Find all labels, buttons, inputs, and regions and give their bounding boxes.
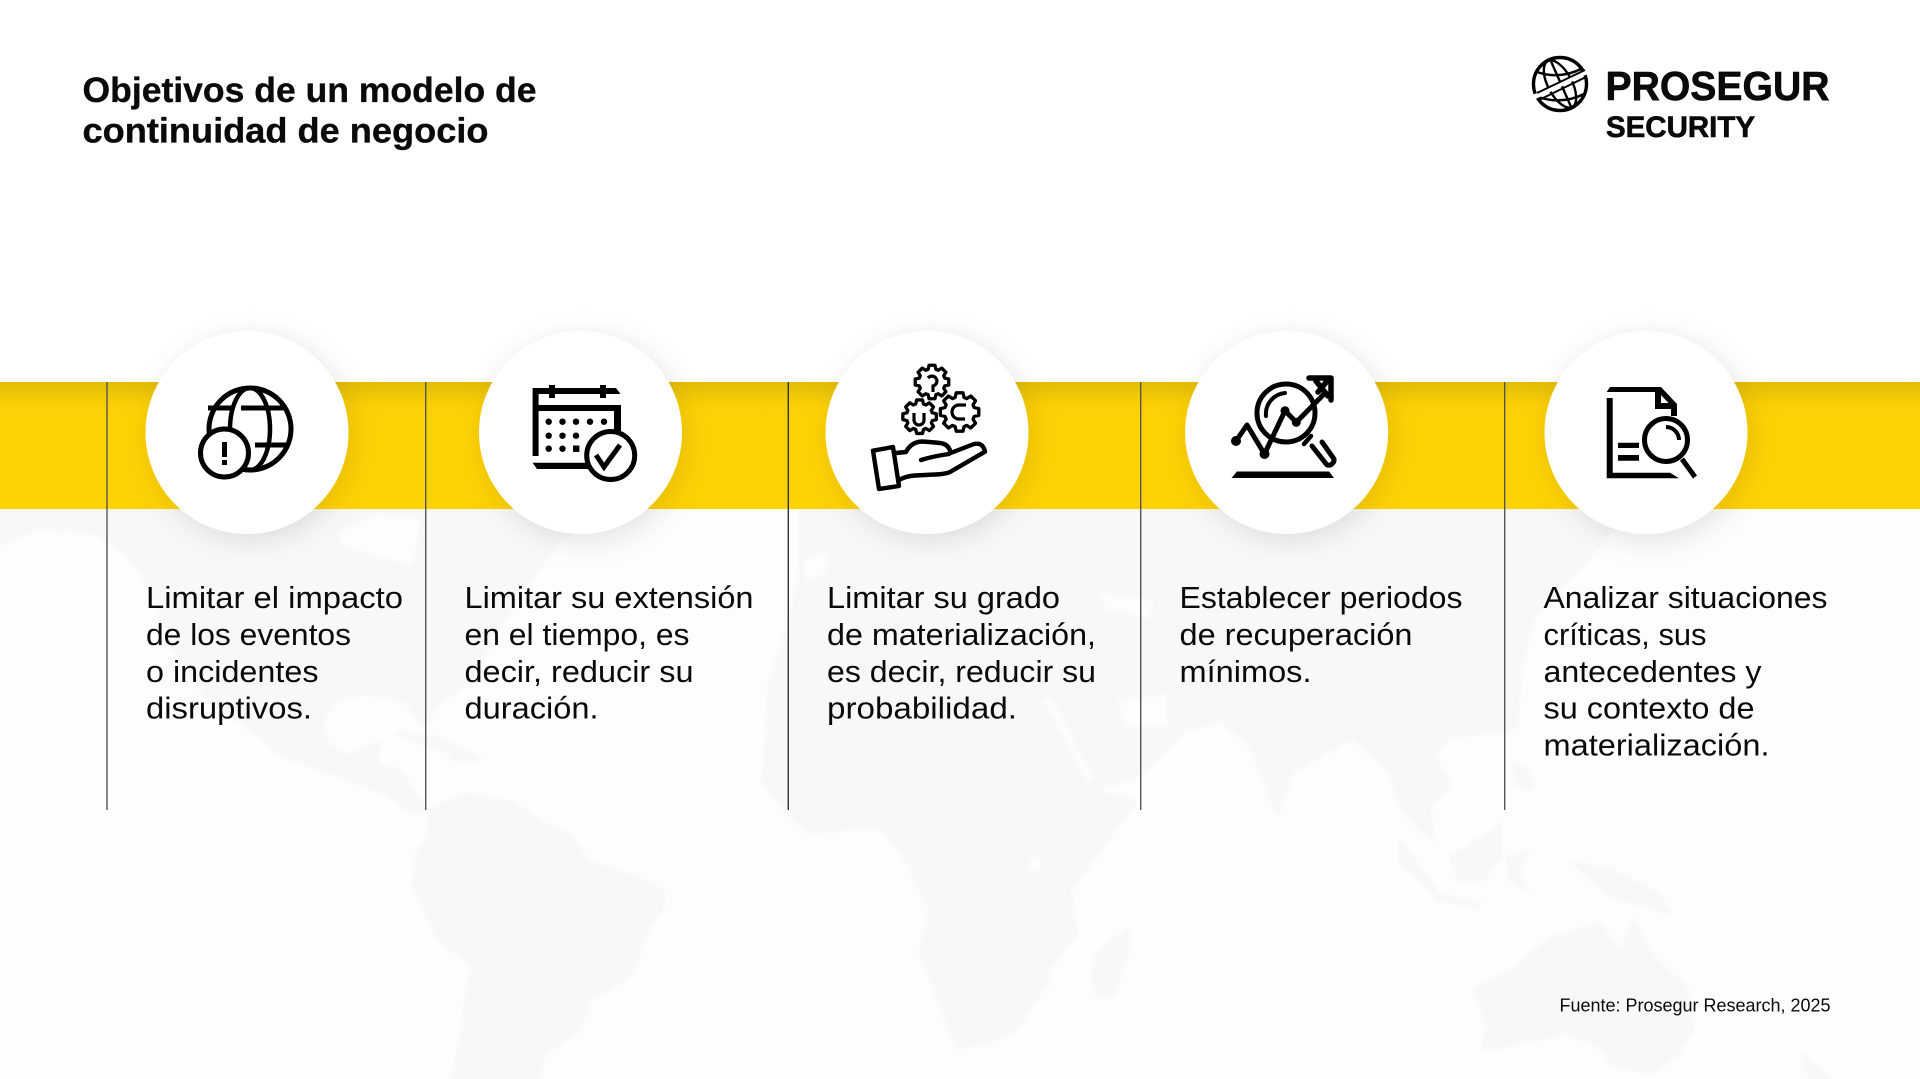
text: limitar su grado: es decir, reducir su xyxy=(827,654,1096,689)
panel: establecer periodos xyxy=(1140,331,1462,810)
logo wordmark: SECURITY xyxy=(1606,111,1755,144)
text: analizar situaciones: su contexto de xyxy=(1544,690,1754,726)
icon circle: hand with gears xyxy=(826,331,1028,534)
text: limitar su grado: de materialización, xyxy=(827,617,1096,652)
logo wordmark xyxy=(1606,63,1830,144)
panel: limitar el impacto xyxy=(106,331,403,810)
text: establecer periodos: de recuperación xyxy=(1180,617,1412,652)
text: limitar su grado xyxy=(827,580,1096,726)
text: limitar el impacto: o incidentes xyxy=(146,654,318,689)
text: limitar su extension xyxy=(464,580,754,726)
text: establecer periodos xyxy=(1180,580,1462,689)
title: continuidad de negocio xyxy=(82,112,488,150)
text: establecer periodos: mínimos. xyxy=(1180,654,1312,689)
panel: limitar su extension xyxy=(425,331,754,810)
text: analizar situaciones xyxy=(1544,580,1828,762)
text: limitar su extension: duración. xyxy=(464,690,598,726)
background: faint world map xyxy=(0,500,1920,1079)
icon: logo globe xyxy=(1532,55,1588,113)
text: establecer periodos: Establecer periodos xyxy=(1180,580,1462,615)
logo: Prosegur Security xyxy=(1532,55,1830,144)
title xyxy=(82,71,536,150)
text: limitar su extension: Limitar su extensión xyxy=(464,580,754,615)
icon circle: globe with alert xyxy=(146,331,348,534)
text: limitar el impacto: disruptivos. xyxy=(146,690,312,726)
text: analizar situaciones: Analizar situaciones xyxy=(1544,580,1828,615)
text: limitar el impacto: Limitar el impacto xyxy=(146,580,403,615)
icon circle: magnifier with rising chart xyxy=(1185,331,1388,534)
text: limitar su extension: en el tiempo, es xyxy=(464,617,690,652)
title: Objetivos de un modelo de xyxy=(82,71,536,110)
text: limitar su grado: probabilidad. xyxy=(827,690,1017,726)
text: analizar situaciones: antecedentes y xyxy=(1544,654,1762,689)
icon circle: document with magnifier xyxy=(1544,331,1748,534)
icon circle: calendar with check xyxy=(479,331,682,534)
text: analizar situaciones: materialización. xyxy=(1544,728,1770,762)
text: limitar el impacto: de los eventos xyxy=(146,617,351,652)
text: limitar el impacto xyxy=(146,580,403,726)
text: limitar su extension: decir, reducir su xyxy=(464,654,694,689)
source note: Fuente: Prosegur Research, 2025 xyxy=(1560,996,1830,1016)
text: analizar situaciones: críticas, sus xyxy=(1544,617,1706,652)
panel: limitar su grado xyxy=(788,331,1096,810)
logo wordmark: PROSEGUR xyxy=(1606,63,1830,109)
text: limitar su grado: Limitar su grado xyxy=(827,580,1060,615)
panel: analizar situaciones xyxy=(1504,331,1828,810)
yellow band xyxy=(0,382,1920,509)
